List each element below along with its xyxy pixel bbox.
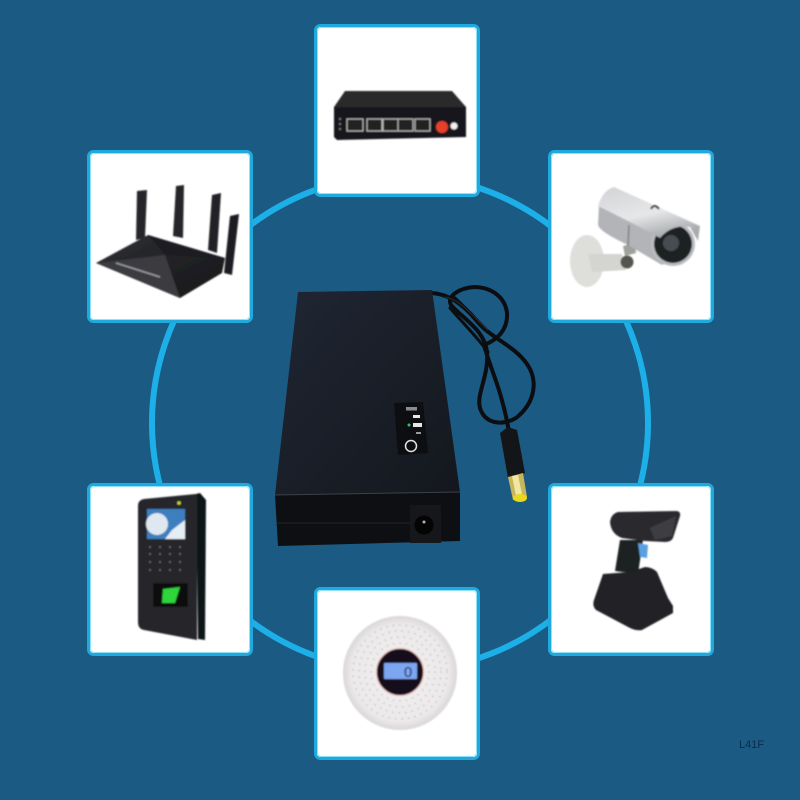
- icon: wireless router: [96, 185, 239, 298]
- connecting ring: [152, 175, 648, 671]
- LCD reading: 0: [404, 664, 412, 681]
- power cable: [432, 287, 534, 432]
- status panel: [394, 402, 428, 455]
- icon: barcode scanner on cradle: [593, 511, 680, 630]
- icon: bullet camera: [570, 187, 700, 287]
- panel: smoke detector: [316, 588, 478, 758]
- unit top face: [275, 290, 460, 495]
- panel: fingerprint terminal: [88, 484, 252, 654]
- product code: L41F: [739, 739, 764, 751]
- icon: access control terminal: [138, 493, 206, 640]
- icon: network switch device: [334, 91, 466, 140]
- panel: router: [88, 152, 252, 322]
- unit front face: [275, 492, 460, 546]
- panel: network switch: [316, 26, 478, 196]
- DC input port: [410, 505, 441, 543]
- icon: DC plug: [500, 427, 527, 502]
- panel: security camera: [550, 152, 712, 322]
- panel: barcode scanner: [550, 484, 712, 654]
- icon: smoke alarm: [343, 616, 457, 730]
- main battery unit: [275, 287, 534, 546]
